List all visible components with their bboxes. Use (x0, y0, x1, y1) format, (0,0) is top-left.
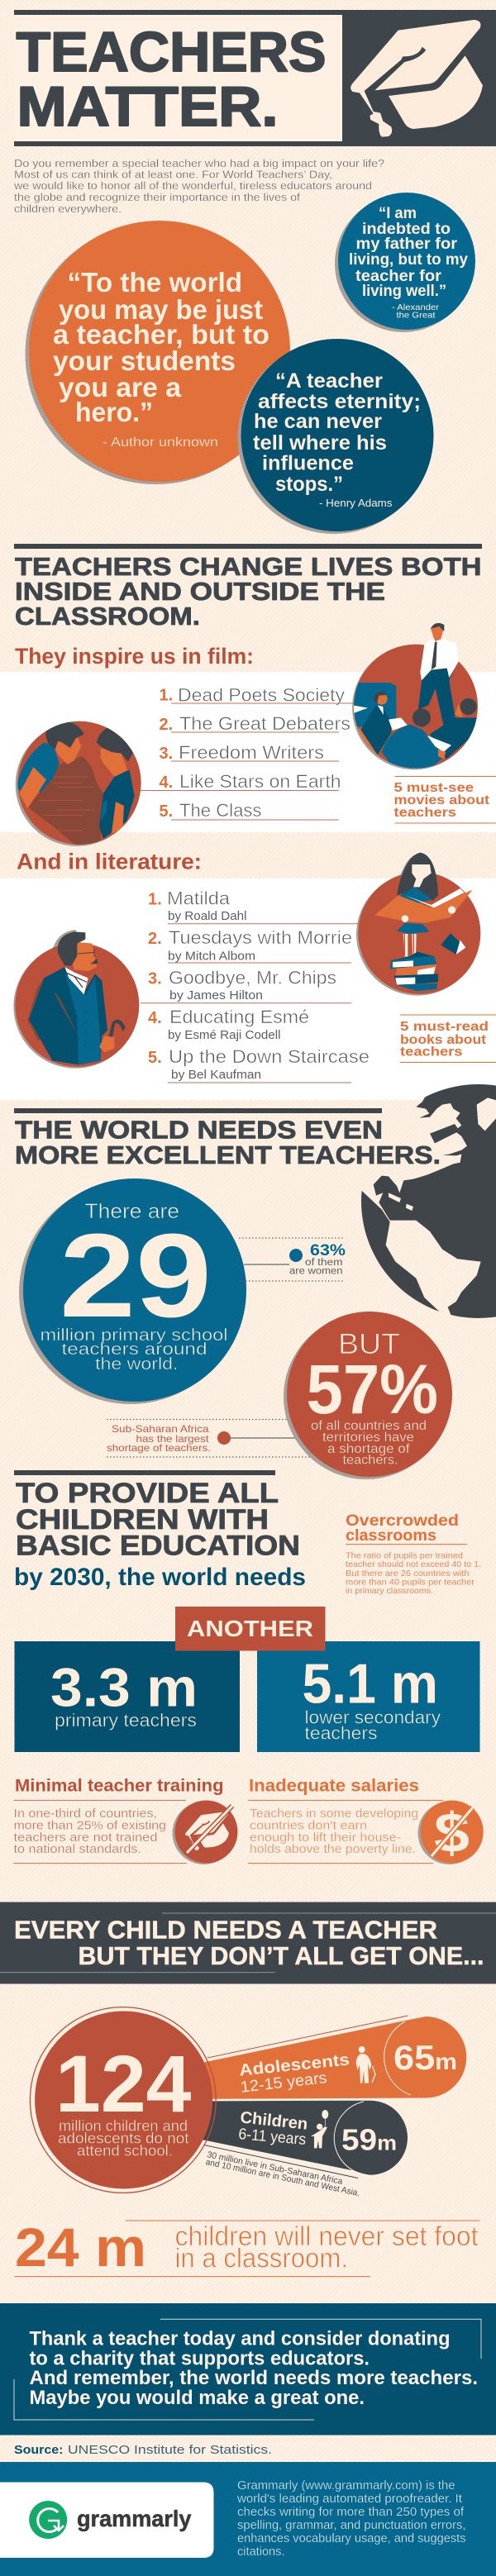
callout: 63% women (239, 1238, 346, 1281)
stat: 24 m children (15, 2217, 479, 2278)
book list: by Esmé Raji Codell (168, 1029, 281, 1042)
book list: by Roald Dahl (168, 910, 246, 923)
source (14, 2444, 272, 2457)
title: TEACHERS (17, 21, 326, 83)
description: spelling, grammar, and punctuation errors, (237, 2519, 466, 2532)
panel: call to action: And remember, the world needs more teachers. (30, 2367, 478, 2389)
logo: grammarly: grammarly (77, 2506, 192, 2531)
stat: 29 million teachers: There are (84, 1200, 179, 1223)
intro text: children everywhere. (14, 202, 122, 215)
book list: 5. (148, 1049, 162, 1067)
book callout: books about (400, 1033, 487, 1047)
quote: author unknown: you are a (59, 372, 182, 402)
chart band: children 59m: Children (239, 2108, 308, 2134)
quote: henry adams: affects eternity; (258, 390, 421, 413)
panel: 3.3 m primary teachers: 3.3 m (50, 1656, 198, 1717)
book list: Educating Esmé (169, 1007, 309, 1027)
heading: teachers change lives (15, 552, 481, 631)
panel: call to action (0, 2303, 496, 2435)
description: world's leading automated proofreader. It (236, 2493, 462, 2506)
stat: 124 million: adolescents do not (58, 2131, 188, 2147)
note: regional breakdown: 30 million live in Sub-Saharan Africa (206, 2150, 344, 2187)
book list: 4. (148, 1009, 162, 1027)
heading: to provide all children: TO PROVIDE ALL (16, 1478, 279, 1509)
film callout: teachers (393, 806, 456, 820)
quote: author unknown: - Author unknown (103, 436, 218, 450)
quote: author unknown: your students (53, 345, 236, 376)
heading: teachers change lives: TEACHERS CHANGE LIVES BOTH (15, 552, 481, 581)
book list: by James Hilton (169, 989, 263, 1002)
stat: 24 m children: 24 m (15, 2217, 146, 2278)
source: UNESCO Institute for Statistics. (68, 2444, 272, 2457)
panel: 5.1 m lower secondary teachers (257, 1641, 479, 1752)
book callout (400, 1015, 496, 1063)
intro text (13, 157, 384, 215)
film list: 2. (159, 716, 173, 734)
banner: every child needs a teacher: EVERY CHILD NEEDS A TEACHER (14, 1916, 437, 1944)
panel: 3.3 m primary teachers: primary teachers (55, 1710, 197, 1731)
stat: 29 million teachers: 29 (60, 1209, 212, 1342)
chart band: adolescents 65m: 65m (393, 2038, 457, 2077)
panel: minimal teacher training: to national standards. (13, 1842, 141, 1856)
panel: overcrowded classrooms: But there are 26 countries with (346, 1569, 470, 1578)
quote: henry adams (238, 339, 433, 534)
book list: 1. (148, 891, 162, 909)
icon: crossed out cap (172, 1800, 238, 1864)
quote: alexander the great: - Alexander (392, 302, 440, 312)
panel: inadequate salaries: Teachers in some developing (250, 1807, 418, 1821)
panel: inadequate salaries: countries don't earn (250, 1818, 367, 1833)
logo: grammarly (0, 2483, 213, 2558)
icon: graduation cap (351, 20, 483, 137)
film list: 4. (159, 774, 173, 792)
callout: sub-saharan africa: has the largest (136, 1433, 209, 1445)
stat: 29 million teachers: teachers around (61, 1340, 207, 1359)
panel: minimal teacher training: In one-third of countries, (13, 1807, 157, 1821)
quote: alexander the great: indebted to (362, 221, 451, 238)
heading: film: They inspire us in film: (15, 644, 254, 669)
panel: overcrowded classrooms: The ratio of pupils per trained (346, 1550, 463, 1560)
callout: sub-saharan africa: shortage of teachers. (107, 1442, 211, 1454)
callout: 63% women: are women (289, 1266, 342, 1276)
stat: 57% shortage: a shortage of (327, 1442, 410, 1456)
illustration: gentleman teacher (13, 930, 139, 1069)
banner: every child needs a teacher (0, 1902, 496, 1983)
chart band: children 59m: 59m (341, 2122, 397, 2157)
note: regional breakdown: and 10 million are in South and West Asia. (205, 2157, 360, 2198)
panel: inadequate salaries (248, 1777, 484, 1864)
panel: inadequate salaries: enough to lift their house- (250, 1831, 401, 1845)
book list (141, 888, 370, 1083)
icon: globe (355, 1080, 496, 1322)
panel: minimal teacher training: more than 25% of existing (13, 1818, 166, 1833)
intro text: Do you remember a special teacher who had a big impact on your life? (14, 157, 384, 169)
book list: Up the Down Staircase (169, 1046, 370, 1067)
heading: world needs more teachers (15, 1116, 441, 1169)
book list: by Bel Kaufman (171, 1069, 261, 1082)
film callout (393, 777, 496, 823)
stat: 124 million: attend school. (77, 2142, 173, 2159)
film list: Freedom Writers (179, 742, 324, 763)
illustration: girl reading on books (356, 853, 480, 996)
quote: alexander the great: my father for (355, 236, 458, 253)
title (17, 21, 326, 138)
stat: 29 million teachers: million primary school (40, 1326, 228, 1345)
heading: teachers change lives: CLASSROOM. (15, 602, 200, 631)
panel: 3.3 m primary teachers (15, 1641, 240, 1752)
chart band: children 59m (165, 2101, 408, 2178)
book list: Goodbye, Mr. Chips (169, 967, 336, 988)
panel: minimal teacher training: teachers are not trained (13, 1831, 157, 1845)
panel: minimal teacher training: Minimal teacher training (15, 1777, 223, 1795)
quote: henry adams: tell where his (253, 431, 387, 455)
stat: 24 m children: in a classroom. (175, 2243, 348, 2273)
quote: henry adams: “A teacher (275, 369, 383, 393)
film list: Dead Poets Society (178, 684, 345, 706)
panel: overcrowded classrooms: classrooms (346, 1527, 436, 1545)
panel: inadequate salaries: Inadequate salaries (249, 1777, 419, 1795)
icon: crossed out dollar: $ (434, 1802, 470, 1864)
film list: 3. (159, 745, 173, 763)
panel: overcrowded classrooms (346, 1512, 481, 1596)
stat: 24 m children: children will never set foot (175, 2221, 478, 2251)
quote: alexander the great: teacher for (355, 268, 442, 285)
quote: henry adams: stops.” (275, 473, 343, 496)
panel: 5.1 m lower secondary teachers: teachers (304, 1722, 377, 1744)
book list: Matilda (167, 888, 231, 909)
callout: sub-saharan africa (107, 1420, 315, 1457)
film list: 5. (159, 802, 173, 821)
intro text: Most of us can think of at least one. For World Teachers’ Day, (14, 169, 332, 180)
quote: author unknown: you may be just (59, 294, 263, 325)
stat: 57% shortage: BUT (338, 1328, 400, 1360)
chart band: adolescents 65m: Adolescents (238, 2050, 351, 2080)
panel: overcrowded classrooms: teacher should not exceed 40 to 1. (346, 1559, 481, 1569)
stat: 57% shortage (284, 1312, 452, 1479)
stat: 124 million (30, 2007, 216, 2193)
stat: 124 million: 124 (55, 2039, 192, 2129)
heading: to provide all children (16, 1478, 300, 1562)
illustration: teacher standing in classroom (352, 623, 479, 769)
intro text: the globe and recognize their importance in the lives of (14, 191, 300, 203)
label: another: ANOTHER (187, 1616, 313, 1641)
panel: call to action: Thank a teacher today and consider donating (30, 2327, 450, 2350)
book callout: 5 must-read (400, 1020, 489, 1034)
label: another (175, 1607, 326, 1651)
quote: author unknown (25, 221, 290, 484)
quote: author unknown: hero.” (75, 397, 153, 427)
panel: grammarly footer (0, 2462, 496, 2576)
header banner (14, 10, 496, 146)
stat: 57% shortage: 57% (306, 1350, 438, 1428)
film callout: movies about (393, 793, 490, 807)
stat: 29 million teachers (19, 1178, 246, 1404)
book callout: teachers (400, 1045, 463, 1059)
film list: The Class (179, 800, 261, 821)
stat: 57% shortage: teachers. (342, 1453, 398, 1468)
film list: Like Stars on Earth (179, 771, 341, 792)
quote: alexander the great: “I am (379, 205, 417, 222)
film list (141, 684, 354, 821)
film callout: 5 must-see (393, 781, 474, 795)
panel: 5.1 m lower secondary teachers: lower secondary (304, 1707, 441, 1727)
description: checks writing for more than 250 types of (237, 2506, 465, 2519)
panel: call to action: Maybe you would make a great one. (30, 2387, 365, 2409)
quote: henry adams: he can never (254, 410, 382, 433)
stat: 29 million teachers: the world. (95, 1355, 179, 1374)
description: Grammarly (www.grammarly.com) is the (237, 2479, 455, 2493)
quote: alexander the great: living well.” (362, 283, 446, 300)
panel: overcrowded classrooms: in primary classrooms. (346, 1586, 433, 1596)
chart band: children 59m: 6-11 years (238, 2126, 307, 2149)
stat: 124 million: million children and (59, 2117, 188, 2134)
banner: every child needs a teacher: BUT THEY DON’T ALL GET ONE... (78, 1941, 484, 1970)
heading: teachers change lives: INSIDE AND OUTSIDE THE (15, 577, 385, 606)
icon: adolescent (356, 2046, 375, 2083)
book list: 3. (148, 970, 162, 988)
quote: alexander the great (335, 193, 475, 332)
intro text: we would like to honor all of the wonderful, tireless educators around (13, 179, 372, 192)
callout: 63% women: 63% (310, 1242, 346, 1259)
chart band: adolescents 65m (165, 2016, 466, 2099)
heading: to provide all children: CHILDREN WITH (16, 1504, 269, 1536)
subheading: by 2030: by 2030, the world needs (14, 1564, 306, 1591)
heading: world needs more teachers: MORE EXCELLENT TEACHERS. (15, 1140, 441, 1169)
source: Source: (14, 2444, 63, 2457)
callout: 63% women: of them (305, 1258, 342, 1268)
quote: alexander the great: the Great (397, 311, 436, 321)
heading: literature: And in literature: (17, 850, 202, 874)
panel: minimal teacher training (13, 1777, 238, 1864)
stat: 57% shortage: territories have (322, 1431, 414, 1445)
heading: to provide all children: BASIC EDUCATION (16, 1531, 300, 1562)
chart band: adolescents 65m: 12-15 years (240, 2069, 328, 2097)
book list: Tuesdays with Morrie (169, 927, 352, 948)
film list: The Great Debaters (179, 713, 351, 734)
description: enhances vocabulary usage, and suggests (237, 2532, 466, 2545)
book list: 2. (148, 930, 162, 948)
book list: by Mitch Albom (168, 950, 255, 964)
icon: crossed out dollar (418, 1800, 484, 1864)
film list: 1. (159, 686, 173, 704)
quote: henry adams: influence (262, 451, 354, 474)
heading: world needs more teachers: THE WORLD NEEDS EVEN (15, 1116, 383, 1144)
description: citations. (237, 2545, 284, 2559)
description (236, 2479, 466, 2559)
quote: henry adams: - Henry Adams (319, 498, 392, 509)
panel: overcrowded classrooms: Overcrowded (346, 1512, 459, 1530)
panel: overcrowded classrooms: more than 40 pupils per teacher (346, 1577, 475, 1587)
quote: alexander the great: living, but to my (349, 251, 468, 269)
quote: author unknown: a teacher, but to (53, 319, 269, 350)
panel: inadequate salaries: holds above the poverty line. (250, 1842, 416, 1856)
illustration: students and teacher in film (16, 721, 141, 846)
title: MATTER. (17, 75, 278, 138)
panel: 5.1 m lower secondary teachers: 5.1 m (303, 1653, 438, 1716)
quote: author unknown: “To the world (68, 267, 242, 298)
icon: child with balloon (311, 2110, 328, 2148)
callout: sub-saharan africa: Sub-Saharan Africa (112, 1423, 209, 1435)
panel: call to action: to a charity that supports educators. (30, 2347, 370, 2370)
stat: 57% shortage: of all countries and (311, 1419, 427, 1433)
